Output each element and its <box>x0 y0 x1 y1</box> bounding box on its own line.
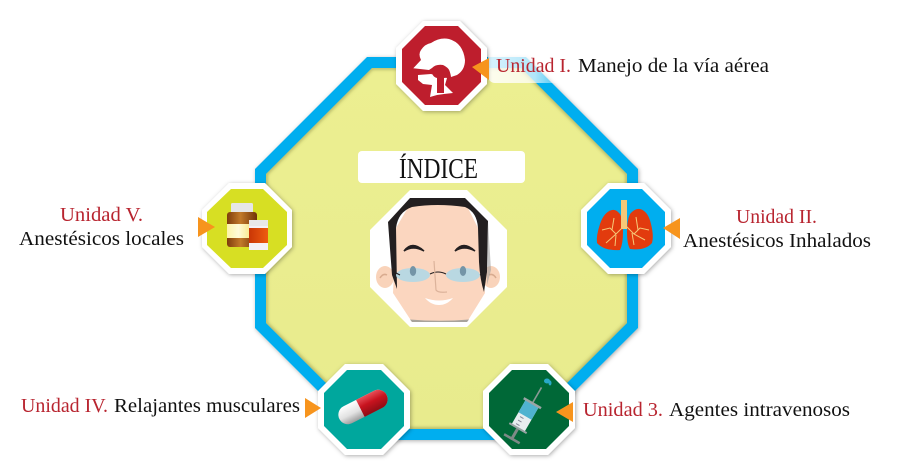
arrow: unit I <box>472 58 489 80</box>
arrow: unit V <box>198 217 215 237</box>
title: índice: ÍNDICE <box>399 154 478 185</box>
icon: capsule, unit IV <box>318 364 410 455</box>
portrait: doctor face <box>370 190 507 327</box>
icon: medicine bottles, unit V <box>202 183 292 274</box>
label: unit V <box>19 205 184 250</box>
icon: syringe, unit 3 <box>483 364 575 455</box>
arrow: unit IV <box>305 398 321 418</box>
title: índice <box>358 151 525 185</box>
label: unit 3 <box>583 400 850 421</box>
label: unit 3: Agentes intravenosos <box>669 400 850 421</box>
label: unit 3: Unidad 3. <box>583 400 663 421</box>
label: unit V: Unidad V. <box>60 205 143 226</box>
arrow: unit II <box>663 218 680 239</box>
label: unit IV: Unidad IV. <box>21 396 108 417</box>
icon: airway, unit I <box>396 21 487 111</box>
label: unit V: Anestésicos locales <box>19 229 184 250</box>
label: unit I: Unidad I. <box>496 56 571 77</box>
arrow: unit 3 <box>556 402 573 422</box>
icon: lungs, unit II <box>581 183 671 274</box>
label: unit IV <box>21 396 300 417</box>
central octagon <box>255 57 638 440</box>
label: unit II: Unidad II. <box>736 207 817 228</box>
label: unit IV: Relajantes musculares <box>114 396 300 417</box>
highlight behind unit I label <box>488 52 573 83</box>
label: unit I <box>496 56 769 77</box>
label: unit II: Anestésicos Inhalados <box>683 231 871 252</box>
label: unit II <box>683 207 871 252</box>
label: unit I: Manejo de la vía aérea <box>578 56 769 77</box>
